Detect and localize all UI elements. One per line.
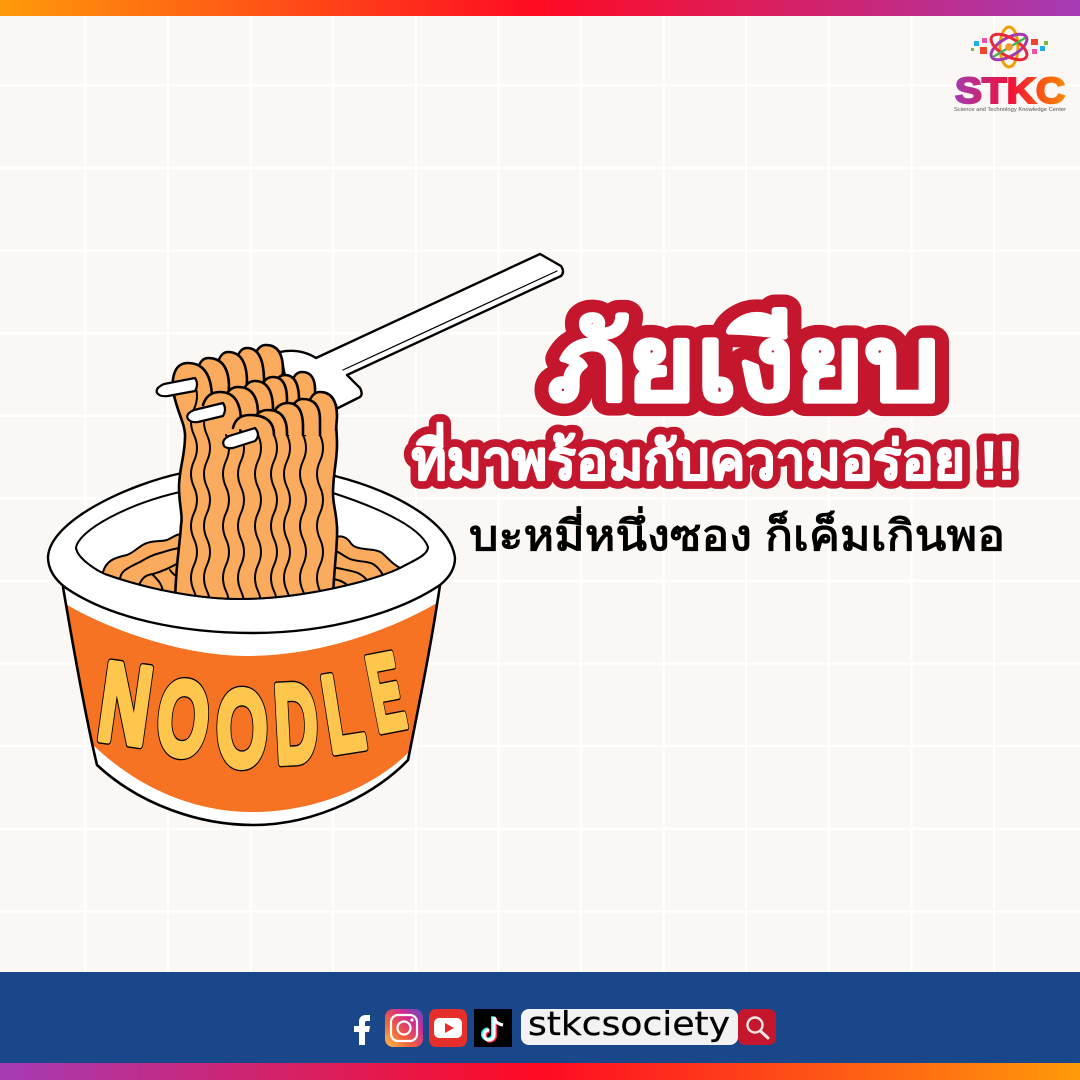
cup opening [76, 492, 428, 599]
NOODLE label: O [152, 657, 214, 780]
NOODLE label: N [92, 638, 159, 769]
noodles in cup [102, 533, 400, 592]
hanging noodle strands [157, 345, 337, 617]
noodle cup illustration [48, 254, 563, 825]
NOODLE label: N [92, 638, 159, 769]
top gradient bar [0, 0, 1080, 16]
NOODLE label: D [271, 661, 321, 788]
icon: facebook [354, 1015, 370, 1045]
NOODLE label: E [359, 630, 413, 755]
back row of noodle loops [172, 344, 284, 396]
logo wordmark: STKC [955, 70, 1065, 111]
NOODLE label: O [216, 668, 268, 790]
icon: tiktok [474, 1009, 512, 1047]
strand wave lines [191, 383, 323, 617]
icon: instagram [385, 1009, 423, 1047]
NOODLE label [92, 630, 413, 790]
cup body [63, 585, 440, 825]
fork tines [157, 378, 258, 448]
NOODLE label: O [216, 668, 268, 790]
icon: youtube [429, 1009, 467, 1047]
bottom gradient bar [0, 1063, 1080, 1080]
main title: ภัยเงียบ [548, 305, 940, 423]
footer band [0, 972, 1080, 1080]
logo atom icon [971, 27, 1048, 67]
NOODLE label: E [359, 630, 413, 755]
front row of noodle loops [233, 392, 337, 440]
NOODLE label: L [315, 648, 371, 776]
search box [521, 1009, 738, 1045]
main title: ภัยเงียบ [548, 305, 940, 423]
supporting line: บะหมี่หนึ่งซอง ก็เค็มเกินพอ [469, 507, 1005, 559]
logo tagline: Science and Technology Knowledge Center [954, 107, 1066, 113]
second row of noodle loops [203, 372, 315, 440]
social row [354, 1004, 776, 1047]
NOODLE label: O [152, 657, 214, 780]
NOODLE label: D [271, 661, 321, 788]
STKC logo [954, 27, 1066, 113]
subtitle: ที่มาพร้อมกับความอร่อย !! [412, 422, 1016, 491]
cup rim [48, 473, 455, 633]
subtitle: ที่มาพร้อมกับความอร่อย !! [412, 422, 1016, 491]
orange label band [67, 603, 437, 812]
NOODLE label: L [315, 648, 371, 776]
icon: search button [738, 1009, 776, 1045]
fork [280, 254, 563, 412]
handle text: stkcsociety [528, 1004, 730, 1043]
